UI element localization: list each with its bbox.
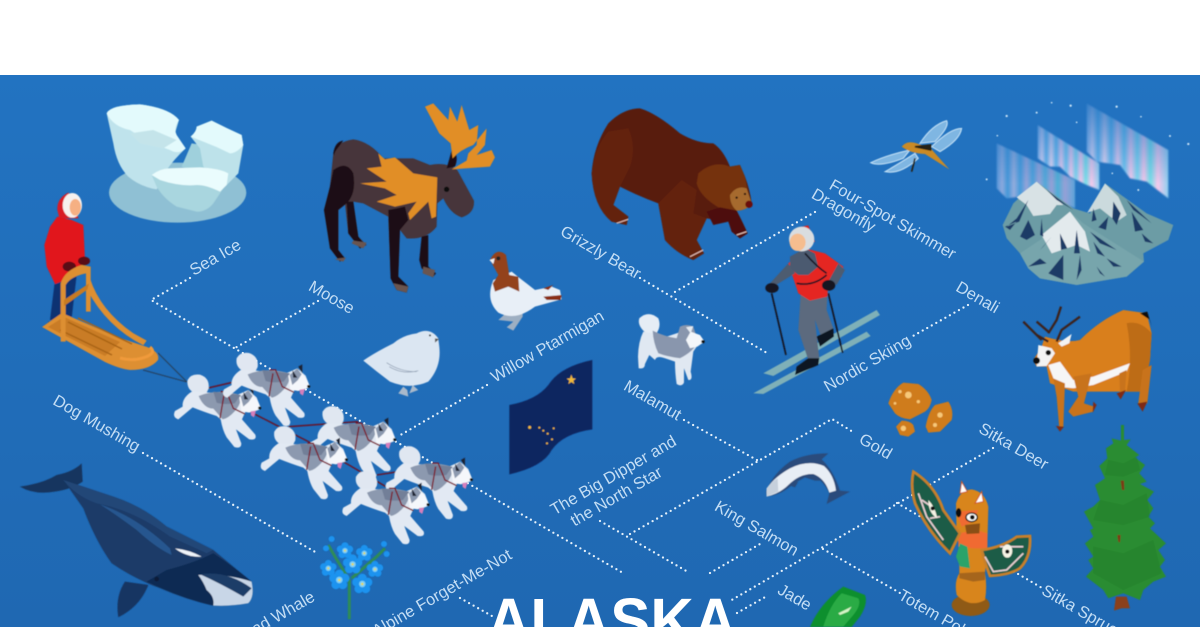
icon: moose	[324, 103, 495, 293]
white top band	[0, 0, 1200, 75]
label: Malamut: Malamut	[621, 377, 685, 424]
label: Gold: Gold	[856, 430, 895, 463]
label: Dog Mushing: Dog Mushing	[50, 392, 143, 456]
label: Sitka Deer: Sitka Deer	[976, 420, 1052, 474]
icon: king salmon	[766, 453, 850, 504]
label: Denali: Denali	[953, 278, 1002, 317]
icon: Denali mountains	[1003, 182, 1173, 285]
icon: malamute	[638, 314, 705, 385]
icon: alpine forget-me-not	[320, 536, 390, 619]
label: Four-Spot Skimmer: Four-Spot Skimmer	[826, 176, 959, 263]
label: Jade: Jade	[775, 581, 814, 614]
text labels	[50, 176, 1129, 627]
icon: four-spot skimmer dragonfly	[871, 121, 962, 172]
icon: sitka deer	[1023, 307, 1152, 392]
label: Grizzly Bear: Grizzly Bear	[557, 222, 644, 283]
icon: sled dog team	[174, 353, 473, 544]
icon: sitka spruce	[1084, 425, 1166, 611]
icon: totem pole	[912, 472, 1030, 616]
icon: nordic skier	[753, 225, 880, 394]
label: Sea Ice: Sea Ice	[187, 236, 244, 279]
icon: sled	[42, 265, 187, 382]
icon: aurora	[997, 103, 1168, 208]
icon: bowhead whale	[20, 463, 253, 617]
label: The Big Dipper and: The Big Dipper and	[547, 432, 680, 519]
label: the North Star: the North Star	[568, 463, 666, 530]
icon: alaska flag	[509, 360, 592, 474]
icon: white ptarmigan	[363, 331, 440, 397]
icon: sea ice	[107, 104, 246, 223]
icon: stars	[986, 102, 1189, 191]
dotted connector lines	[143, 212, 1042, 616]
label: Moose: Moose	[306, 277, 357, 318]
icon: willow ptarmigan	[489, 252, 562, 331]
label: Nordic Skiing: Nordic Skiing	[821, 332, 914, 396]
icon: musher and sled	[44, 193, 90, 332]
icon: jade	[810, 587, 866, 627]
icon: grizzly bear	[592, 108, 753, 260]
label: Willow Ptarmigan: Willow Ptarmigan	[488, 307, 607, 386]
icon: gold nuggets	[888, 383, 952, 437]
label: Dragonfly: Dragonfly	[808, 185, 879, 236]
label: King Salmon: King Salmon	[711, 497, 802, 560]
icon: deer legs	[1053, 365, 1152, 432]
